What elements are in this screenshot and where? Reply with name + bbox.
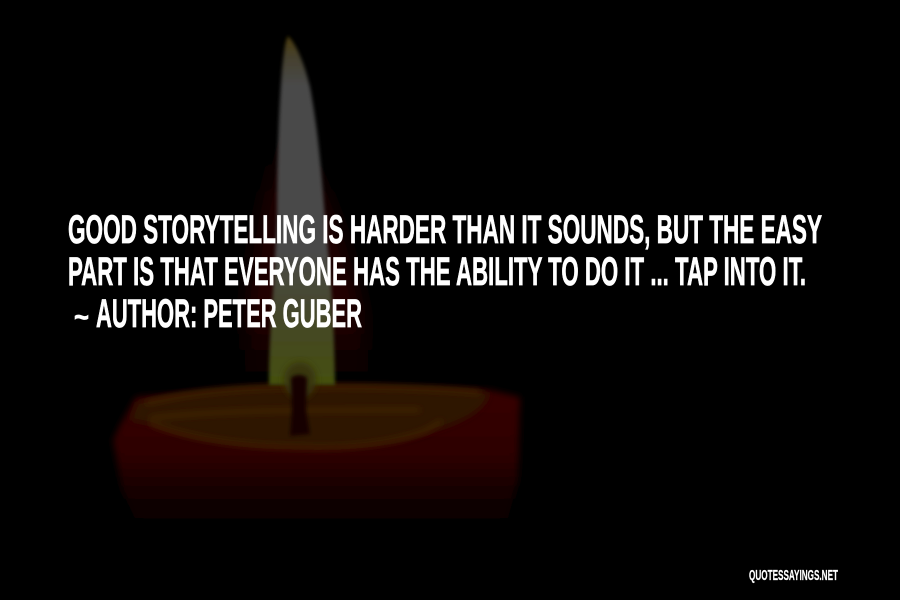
flame xyxy=(269,36,335,385)
candle illustration xyxy=(113,36,520,530)
author name: AUTHOR: PETER GUBER xyxy=(96,292,362,336)
flame base shading xyxy=(284,362,316,398)
candle top surface xyxy=(130,386,488,447)
tilde: ~ xyxy=(74,301,89,334)
author attribution xyxy=(74,292,362,336)
flame glow xyxy=(245,110,368,385)
wick xyxy=(290,375,310,436)
candle body xyxy=(113,384,520,530)
candle rim highlight xyxy=(146,387,480,447)
quote text xyxy=(68,208,822,294)
